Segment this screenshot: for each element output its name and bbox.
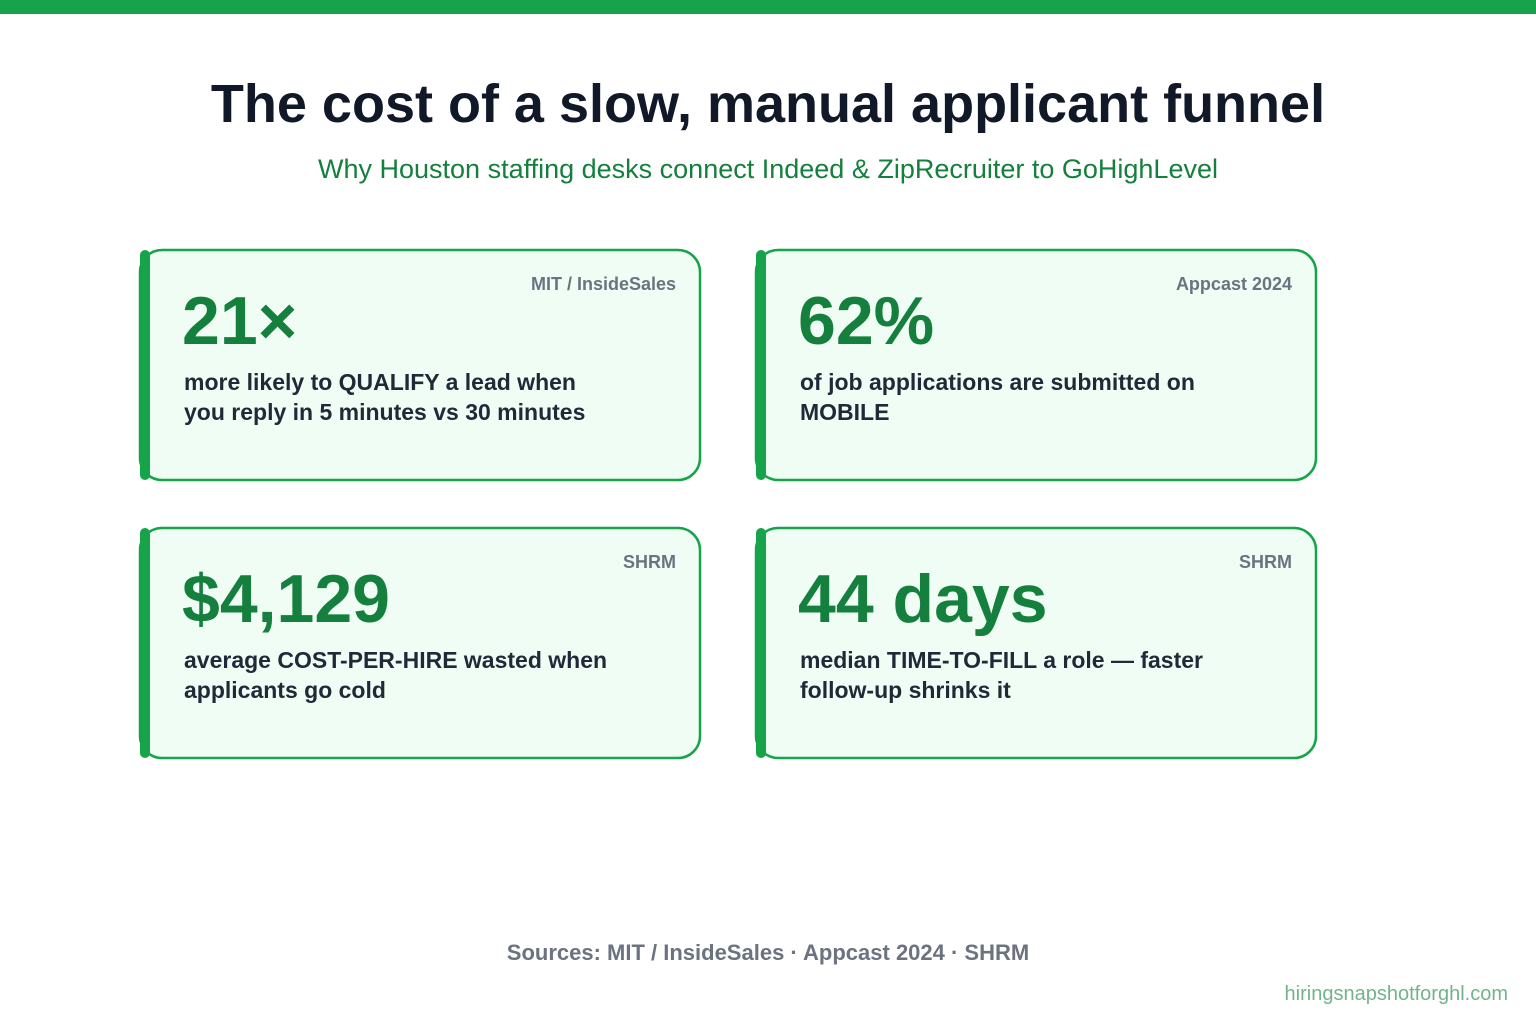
stat number: 62% [798, 283, 934, 359]
card background [756, 250, 1316, 480]
stat description: average COST-PER-HIRE wasted when [184, 647, 607, 673]
title: The cost of a slow, manual applicant funnel [211, 74, 1325, 134]
stat number: 21× [182, 283, 297, 359]
subtitle: Why Houston staffing desks connect Indeed & ZipRecruiter to GoHighLevel [318, 154, 1218, 184]
website watermark: hiringsnapshotforghl.com [1285, 983, 1508, 1005]
panel: 62% stat [756, 250, 1316, 480]
source label: Appcast 2024 [1176, 274, 1292, 294]
card background [140, 528, 700, 758]
card background [756, 528, 1316, 758]
panel: $4,129 stat [140, 528, 700, 758]
sources footer: Sources: MIT / InsideSales · Appcast 2024 · SHRM [507, 940, 1029, 965]
stat description: you reply in 5 minutes vs 30 minutes [184, 399, 585, 425]
card accent bar [756, 528, 766, 758]
source label: SHRM [623, 552, 676, 572]
stat number: $4,129 [182, 561, 390, 637]
source label: SHRM [1239, 552, 1292, 572]
stat number: 44 days [798, 561, 1048, 637]
stat description: applicants go cold [184, 677, 386, 703]
top accent bar [0, 0, 1536, 14]
panel: 44 days stat [756, 528, 1316, 758]
panel: 21x stat [140, 250, 700, 480]
card accent bar [140, 250, 150, 480]
card accent bar [756, 250, 766, 480]
stat description: median TIME-TO-FILL a role — faster [800, 647, 1203, 673]
card accent bar [140, 528, 150, 758]
card background [140, 250, 700, 480]
stat description: follow-up shrinks it [800, 677, 1011, 703]
stat description: more likely to QUALIFY a lead when [184, 369, 576, 395]
stat description: of job applications are submitted on [800, 369, 1195, 395]
source label: MIT / InsideSales [531, 274, 676, 294]
stat description: MOBILE [800, 399, 889, 425]
